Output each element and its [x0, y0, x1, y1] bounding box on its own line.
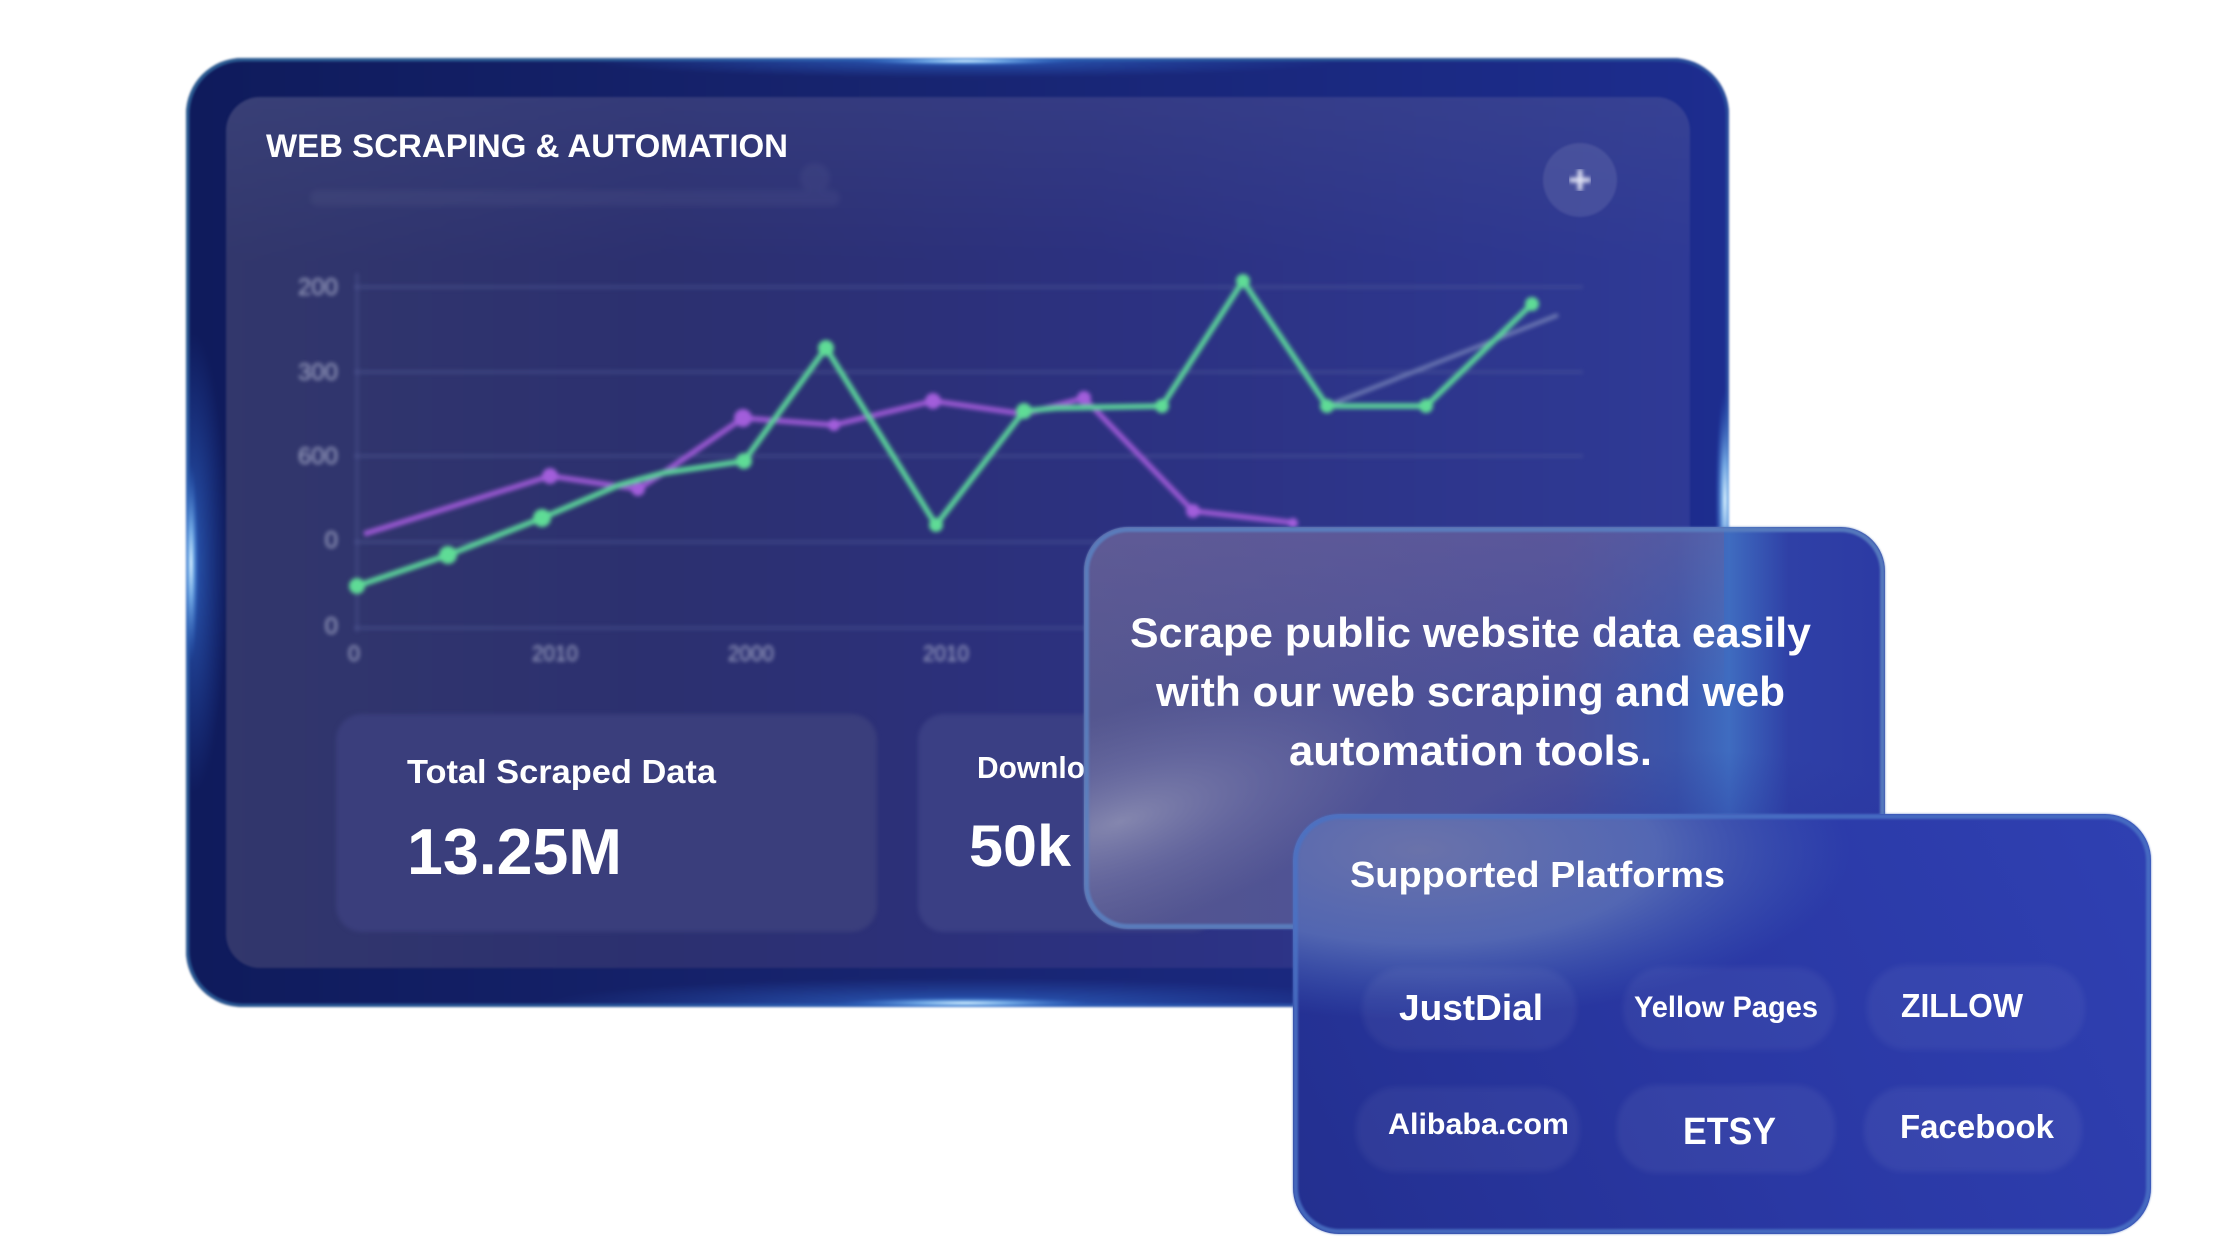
chart y-axis labels: 0	[325, 527, 338, 554]
chart y-axis labels: 600	[298, 443, 338, 470]
chart y-axis labels: 0	[325, 613, 338, 640]
platform chips	[1356, 965, 2085, 1173]
heading: dashboard title: WEB SCRAPING & AUTOMATION	[266, 128, 788, 164]
card label: Total Scraped Data	[407, 753, 717, 790]
chart x-axis labels: 2010	[532, 641, 578, 666]
card: total scraped data	[336, 714, 877, 932]
panel: supported platforms	[1293, 814, 2151, 1234]
panel heading: Supported Platforms	[1350, 854, 1725, 895]
chart y-axis labels: 300	[298, 359, 338, 386]
card value: 50k	[969, 814, 1072, 879]
platform names: Alibaba.com	[1388, 1108, 1569, 1141]
chart: line chart with two series	[298, 273, 1583, 666]
chart y-axis labels	[298, 274, 338, 640]
platform names: Facebook	[1900, 1108, 2055, 1145]
description text: with our web scraping and web	[1155, 668, 1785, 715]
chart purple series	[364, 391, 1298, 534]
panel: description callout	[1084, 527, 1885, 929]
card label: Downlo	[977, 750, 1085, 785]
platform names: ZILLOW	[1901, 987, 2024, 1024]
chart x-axis labels: 2010	[923, 641, 969, 666]
chart x-axis labels: 0	[348, 641, 360, 666]
platform names: ETSY	[1683, 1111, 1776, 1153]
platform names: JustDial	[1399, 987, 1543, 1028]
chart green series	[349, 274, 1539, 594]
card: downloads	[918, 714, 1218, 932]
chart grey trend line	[1327, 315, 1558, 406]
card value: 13.25M	[407, 815, 622, 888]
description text: Scrape public website data easily	[1130, 609, 1812, 656]
chart grid lines	[354, 273, 1583, 632]
decorative blurred sub-header smudge	[310, 163, 840, 206]
platform names: Yellow Pages	[1634, 991, 1818, 1024]
panel: dashboard device frame	[156, 42, 1735, 1030]
chart y-axis labels: 200	[298, 274, 338, 301]
chart x-axis labels: 2000	[728, 641, 774, 666]
description text	[1130, 609, 1812, 774]
panel: inner dashboard screen	[226, 97, 1690, 968]
platform names	[1388, 987, 2055, 1153]
chart x-axis labels	[348, 641, 969, 666]
frame edge glows	[156, 42, 1735, 1030]
button: plus icon	[1543, 143, 1617, 217]
description text: automation tools.	[1289, 727, 1652, 774]
